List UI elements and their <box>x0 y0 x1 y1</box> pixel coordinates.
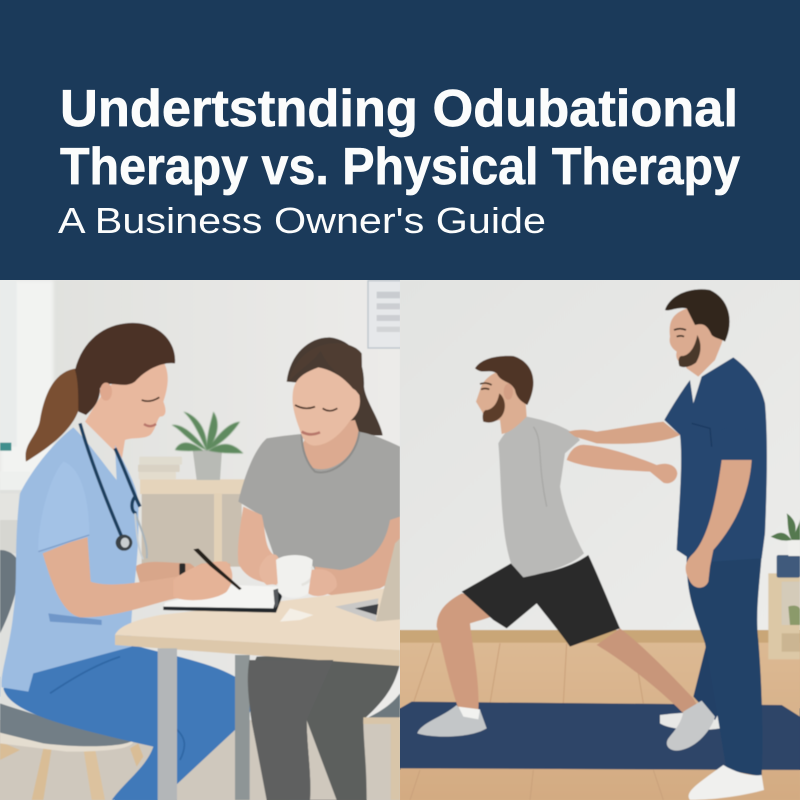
therapist scrub top <box>664 357 767 563</box>
table <box>115 587 400 800</box>
therapist <box>660 289 767 777</box>
nurse hand and pen <box>173 548 242 600</box>
nurse far forearm <box>135 562 203 583</box>
panel: occupational therapy photo <box>0 280 401 800</box>
therapist neck and head <box>670 307 724 377</box>
nurse near arm <box>43 535 232 617</box>
therapist front shoe <box>689 765 764 800</box>
therapist arms <box>686 460 752 588</box>
rear shoe <box>667 701 715 751</box>
back leg <box>597 628 700 713</box>
laptop <box>335 538 400 622</box>
patient neck <box>302 420 362 480</box>
patient arms <box>238 507 277 585</box>
panel base colours <box>0 280 400 800</box>
notebook <box>163 585 282 613</box>
patient shirt <box>238 432 400 587</box>
nurse pants <box>3 642 252 800</box>
nurse scrub top <box>1 427 139 692</box>
coffee mug <box>276 555 337 598</box>
patient thigh over rear leg edge <box>248 660 333 800</box>
patient pants <box>249 650 400 800</box>
shelf with books and plant <box>138 412 245 567</box>
nurse hair <box>75 323 175 415</box>
front shoe <box>417 705 487 737</box>
chair <box>0 550 400 800</box>
header banner <box>0 0 800 281</box>
title: Undertstnding Odubational <box>60 80 738 138</box>
therapist reaching arm <box>568 422 680 444</box>
shelf with plant <box>768 513 800 659</box>
panel: physical therapy photo <box>400 280 800 800</box>
therapist rear leg and shoe <box>660 643 737 730</box>
nurse <box>1 323 252 800</box>
wall poster <box>368 281 401 348</box>
neck and head <box>476 369 527 434</box>
clinic room background <box>0 280 400 800</box>
patient <box>238 337 400 800</box>
patient face <box>292 367 360 446</box>
patient man <box>417 356 715 751</box>
therapist pants <box>687 555 762 777</box>
exercise mat <box>400 702 800 770</box>
front leg <box>437 593 497 710</box>
nurse ponytail <box>26 368 82 462</box>
paper scraps <box>280 608 313 622</box>
patient hair back <box>287 337 383 436</box>
subtitle: A Business Owner's Guide <box>58 200 546 241</box>
panel base colours <box>400 280 800 800</box>
shorts <box>462 555 620 647</box>
table legs <box>158 648 177 800</box>
gym room background <box>400 280 800 800</box>
shirt <box>498 417 584 577</box>
stethoscope <box>80 423 147 559</box>
extended arm <box>567 445 677 483</box>
title <box>60 80 740 196</box>
title: Therapy vs. Physical Therapy <box>60 138 740 196</box>
nurse neck and face <box>85 362 168 480</box>
